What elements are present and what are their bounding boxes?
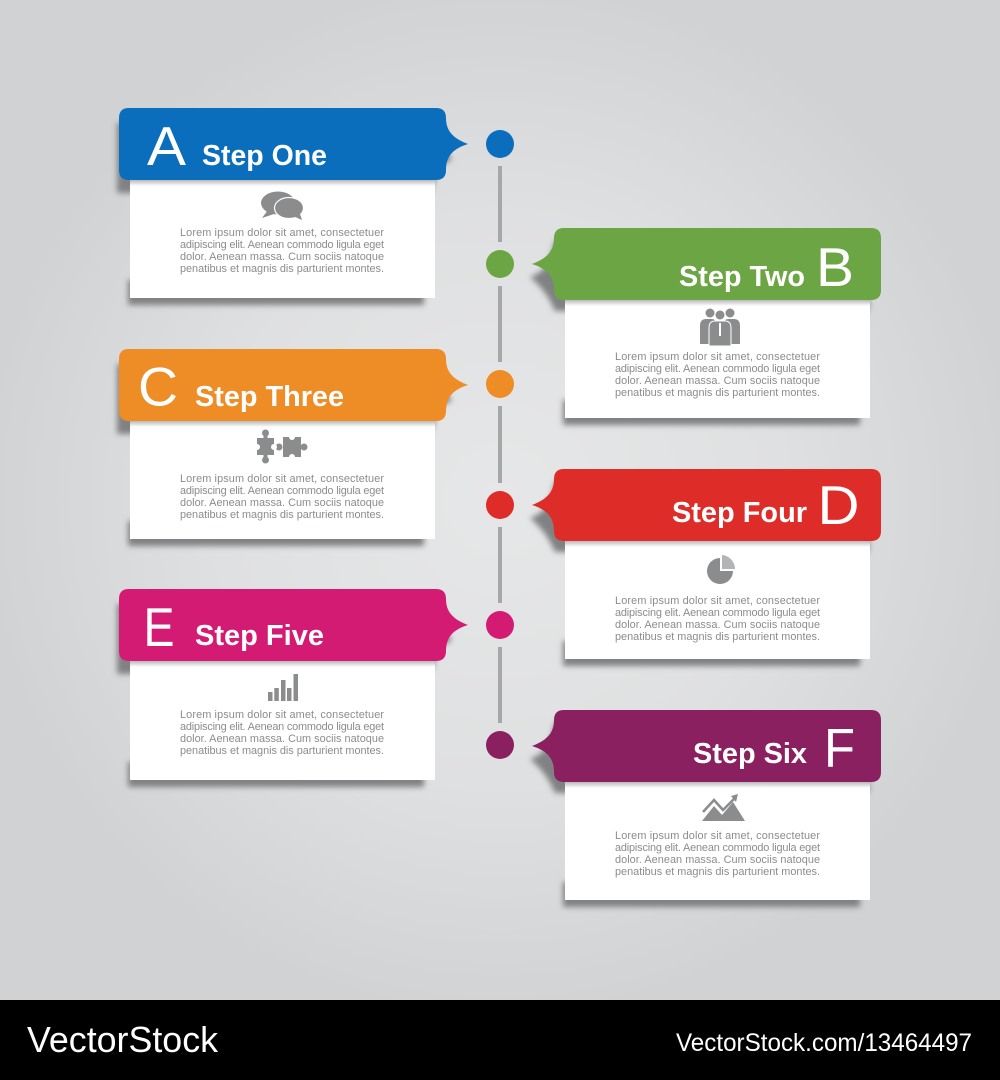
footer brand: VectorStock — [27, 1019, 219, 1060]
timeline dot C — [486, 370, 514, 398]
footer image id: VectorStock.com/13464497 — [676, 1029, 972, 1057]
text block: adipiscing elit. Aenean commodo ligula eget — [615, 607, 820, 619]
text block — [180, 473, 384, 521]
heading: Step Three — [195, 381, 344, 413]
text block: adipiscing elit. Aenean commodo ligula eget — [615, 842, 820, 854]
letter: D — [818, 474, 860, 536]
text block: penatibus et magnis dis parturient montes. — [615, 866, 820, 878]
letter: F — [824, 717, 855, 779]
header tab — [119, 349, 468, 421]
panel: step C — [117, 349, 468, 546]
text block: dolor. Aenean massa. Cum sociis natoque — [615, 375, 820, 387]
panel: step B — [530, 228, 881, 425]
header tab — [119, 589, 468, 661]
text block: Lorem ipsum dolor sit amet, consectetuer — [180, 709, 384, 721]
header tab — [532, 469, 881, 541]
panel: step E — [117, 589, 468, 787]
text block: dolor. Aenean massa. Cum sociis natoque — [180, 251, 384, 263]
card body — [130, 661, 435, 780]
text block: penatibus et magnis dis parturient montes. — [180, 509, 384, 521]
card body — [565, 782, 870, 900]
text block: Lorem ipsum dolor sit amet, consectetuer — [615, 595, 820, 607]
text block — [615, 351, 820, 399]
text block: dolor. Aenean massa. Cum sociis natoque — [615, 854, 820, 866]
text block: adipiscing elit. Aenean commodo ligula eget — [180, 485, 384, 497]
header tab — [532, 228, 881, 300]
text block: Lorem ipsum dolor sit amet, consectetuer — [615, 351, 820, 363]
text block: adipiscing elit. Aenean commodo ligula eget — [615, 363, 820, 375]
letter: C — [138, 356, 178, 418]
text block: dolor. Aenean massa. Cum sociis natoque — [180, 497, 384, 509]
heading: Step Five — [195, 620, 324, 652]
footer bar — [0, 1000, 1000, 1080]
icon: speech bubbles — [261, 192, 304, 220]
panel: step D — [530, 469, 881, 666]
text block — [615, 830, 820, 878]
letter: A — [147, 115, 186, 177]
panel: step A — [117, 108, 468, 305]
header tab — [119, 108, 468, 180]
heading: Step Four — [672, 497, 807, 529]
card body — [565, 541, 870, 659]
text block: penatibus et magnis dis parturient montes. — [180, 745, 384, 757]
icon: puzzle pieces — [254, 430, 308, 464]
panel: step F — [530, 710, 881, 907]
icon: team of people — [700, 308, 740, 346]
text block: Lorem ipsum dolor sit amet, consectetuer — [180, 227, 384, 239]
timeline dot D — [486, 491, 514, 519]
timeline connector — [498, 166, 502, 723]
heading: Step Two — [679, 261, 805, 293]
letter: E — [144, 596, 174, 658]
text block: Lorem ipsum dolor sit amet, consectetuer — [180, 473, 384, 485]
card body — [130, 421, 435, 539]
text block: penatibus et magnis dis parturient montes. — [180, 263, 384, 275]
text block — [180, 709, 384, 757]
text block — [180, 227, 384, 275]
icon: pie chart — [707, 555, 735, 584]
timeline dot E — [486, 611, 514, 639]
timeline dot B — [486, 250, 514, 278]
letter: B — [816, 236, 854, 298]
text block: penatibus et magnis dis parturient montes. — [615, 631, 820, 643]
text block: penatibus et magnis dis parturient montes. — [615, 387, 820, 399]
text block: dolor. Aenean massa. Cum sociis natoque — [180, 733, 384, 745]
text block: adipiscing elit. Aenean commodo ligula eget — [180, 721, 384, 733]
text block: adipiscing elit. Aenean commodo ligula eget — [180, 239, 384, 251]
icon: bar chart — [268, 674, 298, 701]
card body — [130, 180, 435, 298]
text block: dolor. Aenean massa. Cum sociis natoque — [615, 619, 820, 631]
timeline dot A — [486, 130, 514, 158]
heading: Step One — [202, 140, 327, 172]
text block: Lorem ipsum dolor sit amet, consectetuer — [615, 830, 820, 842]
card body — [565, 300, 870, 418]
timeline dot F — [486, 731, 514, 759]
text block — [615, 595, 820, 643]
heading: Step Six — [693, 738, 807, 770]
header tab — [532, 710, 881, 782]
icon: growth arrow over mountains — [702, 794, 745, 821]
